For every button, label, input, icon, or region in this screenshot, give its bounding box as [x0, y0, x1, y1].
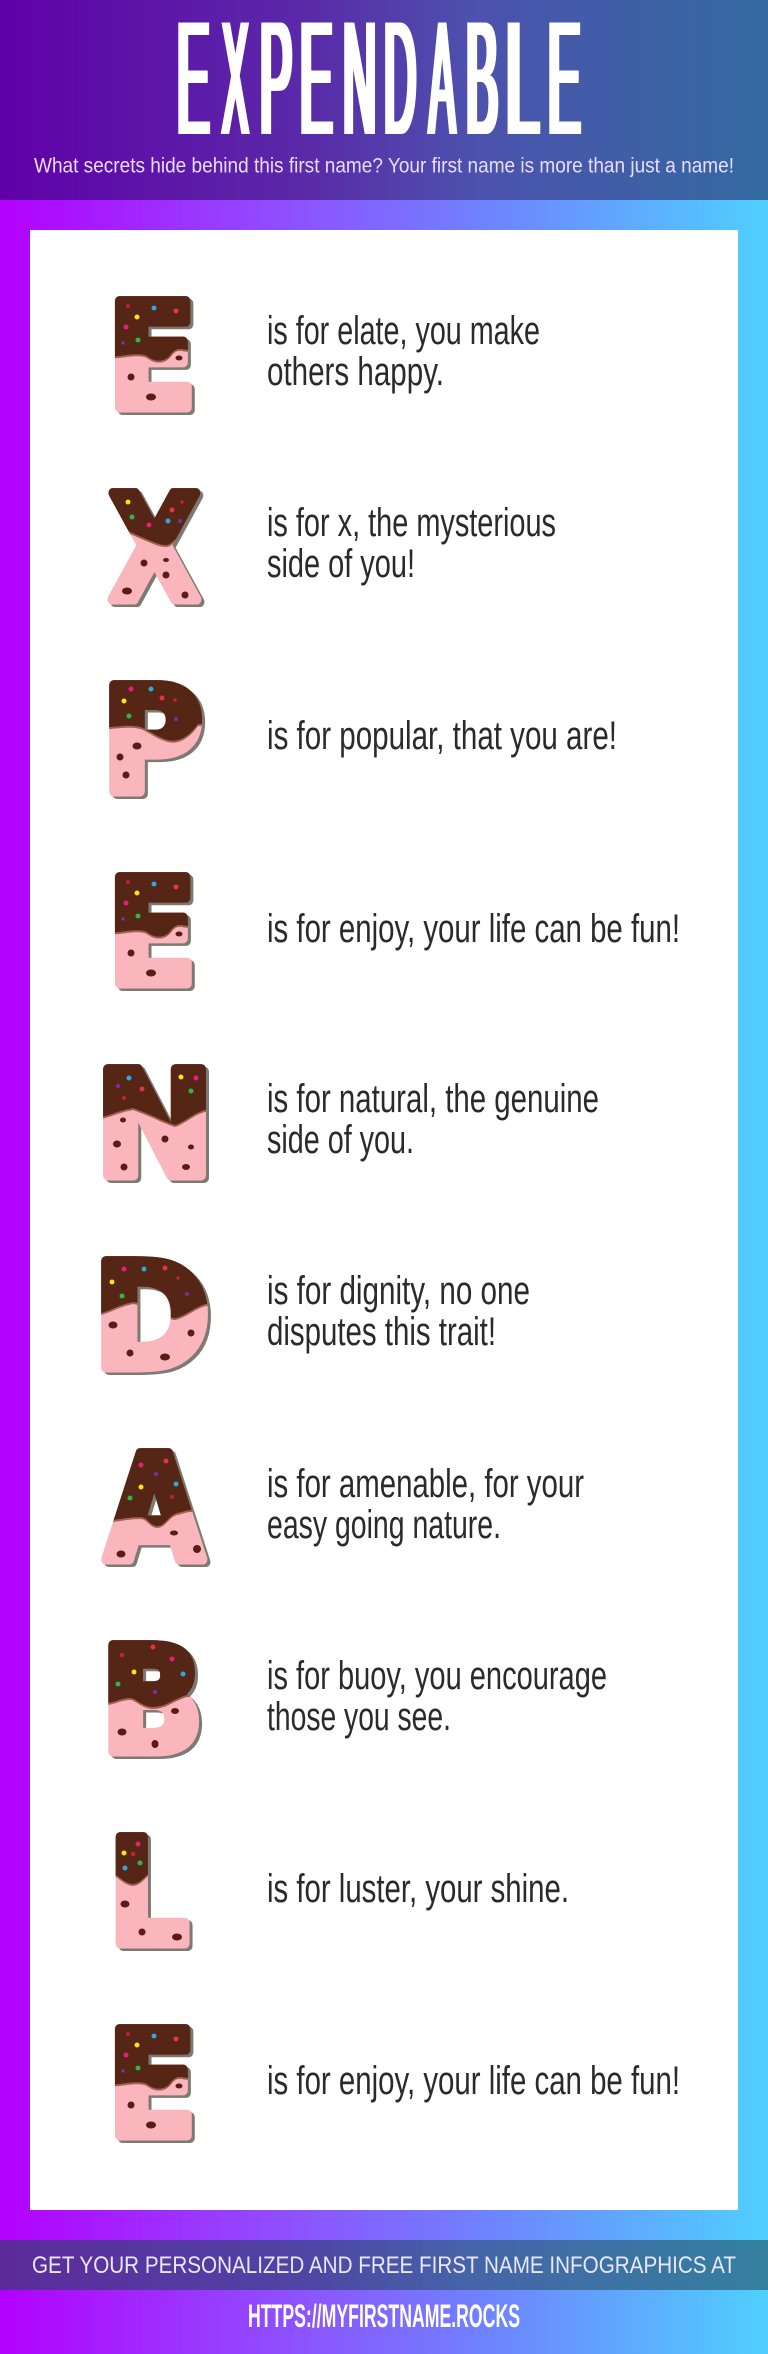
- text: x: is for x, the mysterious: [267, 501, 556, 545]
- icon: chocolate letter E: E: [110, 275, 200, 445]
- icon: chocolate letter L: L: [108, 1808, 189, 1978]
- icon: chocolate letter X: X: [112, 467, 203, 637]
- icon: chocolate letter E: E: [107, 2000, 197, 2170]
- icon: chocolate letter D: D: [96, 1235, 214, 1405]
- icon: chocolate letter A: A: [105, 1424, 204, 1594]
- icon: chocolate letter L: L: [108, 1808, 189, 1978]
- icon: chocolate letter P: P: [101, 656, 203, 826]
- header band: [0, 0, 768, 200]
- icon: chocolate letter D: [101, 1256, 211, 1375]
- text: buoy: those you see.: [267, 1695, 451, 1739]
- icon: chocolate letter E: E: [110, 851, 200, 1021]
- icon: chocolate letter B: B: [100, 1616, 204, 1786]
- icon: chocolate letter E: E: [110, 2003, 200, 2173]
- text: buoy: [267, 1654, 607, 1739]
- footer url: HTTPS://MYFIRSTNAME.ROCKS: [248, 2298, 520, 2334]
- text: natural: side of you.: [267, 1118, 414, 1162]
- icon: chocolate letter N: N: [95, 1040, 214, 1210]
- row: E is for enjoy: [107, 848, 680, 1021]
- icon: chocolate letter N: N: [95, 1040, 214, 1210]
- text: elate: [267, 309, 540, 394]
- text: amenable: easy going nature.: [267, 1503, 501, 1547]
- icon: chocolate letter A: [101, 1448, 210, 1567]
- icon: chocolate letter N: [103, 1064, 209, 1183]
- icon: chocolate letter D: D: [93, 1232, 210, 1402]
- icon: chocolate letter E: E: [107, 2000, 197, 2170]
- row: E is for enjoy (last): [114, 2024, 678, 2143]
- text: dignity: is for dignity, no one: [267, 1269, 530, 1313]
- row: L is for luster: [116, 1832, 566, 1951]
- text: dignity: disputes this trait!: [267, 1310, 496, 1354]
- icon: chocolate letter B: B: [100, 1616, 204, 1786]
- icon: chocolate letter B: [108, 1640, 202, 1759]
- text: natural: [267, 1077, 599, 1162]
- row: P is for popular: [101, 656, 617, 829]
- icon: chocolate letter E: E: [107, 2000, 197, 2170]
- icon: chocolate letter X: X: [109, 464, 200, 634]
- footer band: [0, 2240, 768, 2290]
- icon: chocolate letter X: X: [109, 464, 200, 634]
- icon: chocolate letter L: [116, 1832, 193, 1951]
- row: N is for natural: [103, 1064, 598, 1183]
- icon: chocolate letter X: X: [109, 464, 200, 634]
- text: luster: is for luster, your shine.: [267, 1867, 569, 1911]
- icon: chocolate letter N: N: [95, 1040, 214, 1210]
- icon: chocolate letter E: E: [107, 848, 197, 1018]
- text: dignity: [267, 1269, 530, 1354]
- text: buoy: is for buoy, you encourage: [267, 1654, 607, 1698]
- row: E is for elate: [114, 296, 539, 415]
- title: [177, 0, 582, 169]
- icon: chocolate letter P: P: [101, 656, 203, 826]
- icon: chocolate letter E: E: [107, 272, 197, 442]
- icon: chocolate letter E: [114, 296, 195, 415]
- row: B is for buoy: [108, 1640, 606, 1759]
- icon: chocolate letter X: [107, 488, 204, 607]
- icon: chocolate letter E: [114, 872, 195, 991]
- icon: chocolate letter E: E: [107, 848, 197, 1018]
- text: x: side of you!: [267, 542, 415, 586]
- text: natural: is for natural, the genuine: [267, 1077, 599, 1121]
- text: elate: is for elate, you make: [267, 309, 540, 353]
- text: amenable: [267, 1462, 584, 1547]
- icon: chocolate letter B: B: [104, 1619, 207, 1789]
- icon: chocolate letter A: A: [108, 1427, 207, 1597]
- icon: chocolate letter E: E: [107, 272, 197, 442]
- icon: chocolate letter E: E: [107, 272, 197, 442]
- icon: chocolate letter E: E: [107, 848, 197, 1018]
- icon: chocolate letter E: [114, 2024, 195, 2143]
- icon: chocolate letter D: D: [93, 1232, 210, 1402]
- icon: chocolate letter P: [109, 680, 206, 799]
- icon: chocolate letter L: L: [108, 1808, 189, 1978]
- text: amenable: is for amenable, for your: [267, 1462, 584, 1506]
- row: D is for dignity: [101, 1256, 529, 1375]
- row: A is for amenable: [101, 1448, 584, 1567]
- icon: chocolate letter B: B: [100, 1616, 204, 1786]
- text: popular: is for popular, that you are!: [267, 714, 617, 758]
- icon: chocolate letter A: A: [105, 1424, 204, 1594]
- icon: chocolate letter N: N: [98, 1043, 217, 1213]
- icon: chocolate letter D: D: [93, 1232, 210, 1402]
- icon: chocolate letter P: P: [101, 656, 203, 826]
- row: X is for x: [107, 488, 555, 607]
- icon: chocolate letter P: P: [104, 659, 206, 829]
- icon: chocolate letter A: A: [105, 1424, 204, 1594]
- text: x: [267, 501, 556, 586]
- text: elate: others happy.: [267, 350, 444, 394]
- white panel: [30, 230, 738, 2210]
- icon: chocolate letter L: L: [111, 1811, 192, 1981]
